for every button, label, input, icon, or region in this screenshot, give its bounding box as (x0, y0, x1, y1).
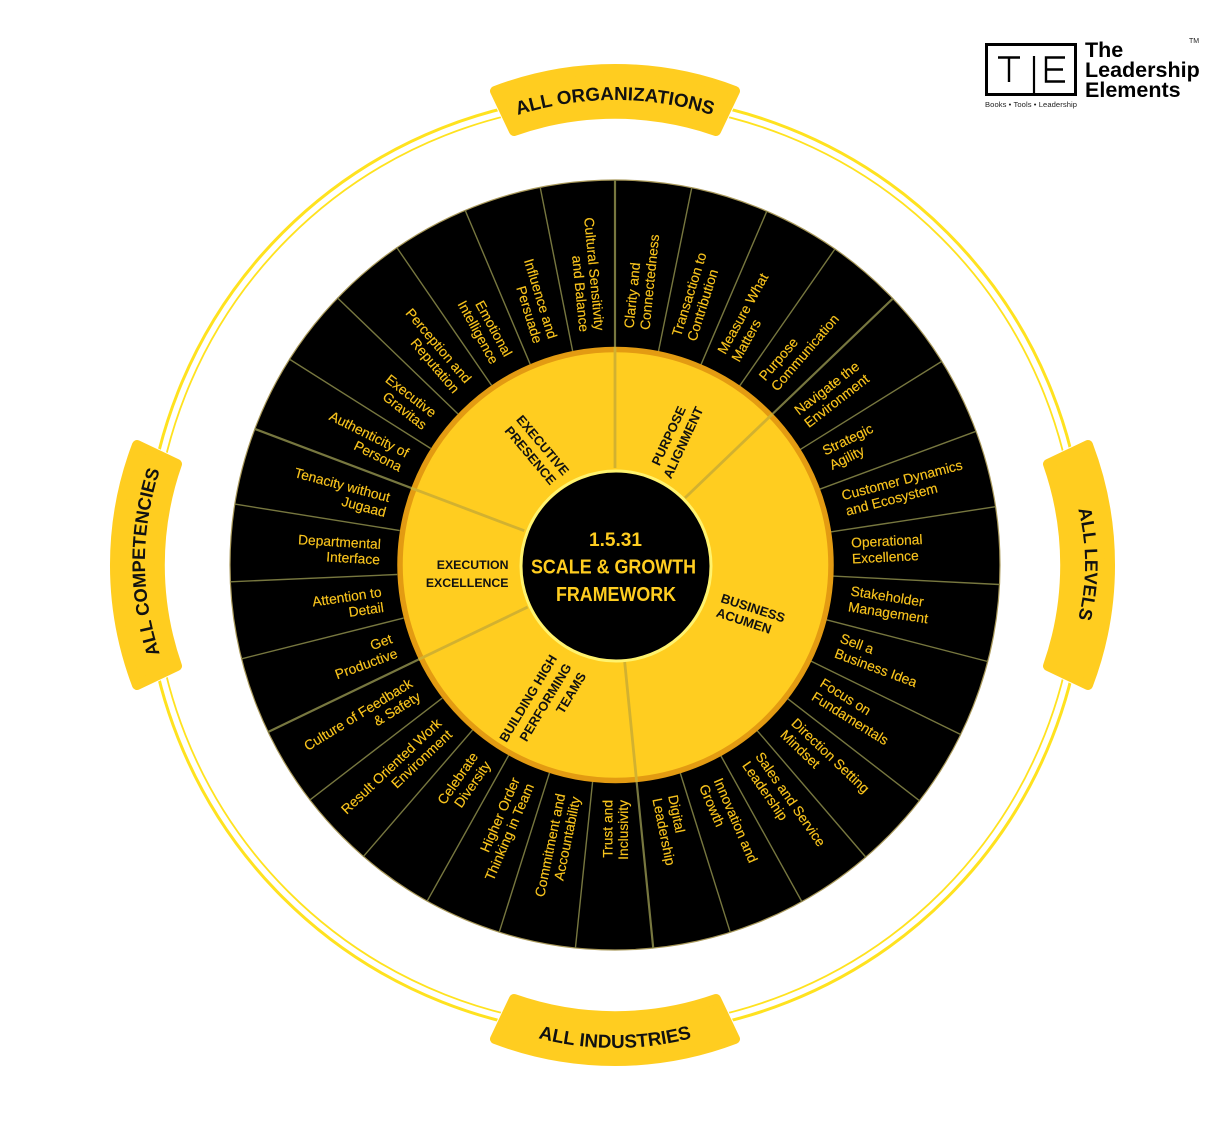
banner: all organizations (490, 64, 740, 136)
banner: all industries (490, 994, 740, 1066)
label: executive gravitas: Gravitas (380, 389, 430, 433)
major spokes between competency groups (255, 180, 893, 948)
label: departmental interface: Departmental (298, 532, 381, 552)
label: clarity and connectedness: Clarity and (622, 262, 643, 329)
center title: FRAMEWORK (556, 584, 676, 606)
logo: The Leadership Elements (985, 38, 1200, 109)
label: tenacity without jugaad: Tenacity without (293, 465, 392, 505)
wheel spokes (230, 187, 1000, 948)
label: commitment and accountability: Commitment and (532, 792, 568, 898)
label: result oriented work environment: Environment (388, 727, 455, 791)
segment labels: 31 competencies (289, 217, 968, 901)
label: influence and persuade: Persuade (513, 284, 545, 345)
label: customer dynamics and ecosystem: and Ecosystem (844, 480, 939, 519)
label: culture of feedback and safety: & Safety (371, 689, 423, 729)
label: emotional intelligence: Emotional (472, 298, 515, 359)
label: innovation and growth: Growth (696, 782, 727, 829)
center hub (521, 471, 711, 661)
category dividers (411, 347, 772, 782)
label: get productive: Get (368, 631, 394, 653)
label: trust and inclusivity: Trust and (600, 800, 616, 858)
category: business acumen: ACUMEN (714, 605, 773, 637)
label: cultural sensitivity and balance: Cultural Sensitivity (581, 217, 607, 331)
category: building high performing teams: BUILDING HIGH (496, 652, 560, 745)
category: building high performing teams: PERFORMING (516, 661, 575, 744)
category: execution excellence: EXCELLENCE (426, 576, 508, 590)
banner: all levels (1043, 440, 1115, 690)
label: celebrate diversity: Diversity (451, 758, 494, 810)
gold category ring (400, 350, 831, 780)
label: attention to detail: Detail (348, 600, 385, 620)
label: trust and inclusivity: Inclusivity (616, 800, 631, 860)
category: business acumen: BUSINESS (719, 591, 787, 625)
logo wordmark: Leadership (1085, 58, 1200, 82)
label: result oriented work environment: Result Oriented Work (338, 716, 445, 817)
label: measure what matters: Matters (729, 317, 764, 364)
label: tenacity without jugaad: Jugaad (340, 494, 388, 520)
label: commitment and accountability: Accountability (552, 795, 583, 882)
logo wordmark: Elements (1085, 78, 1181, 102)
label: direction setting mindset: Mindset (777, 727, 823, 771)
center title: 1.5.31 (589, 529, 642, 551)
category: building high performing teams: TEAMS (553, 669, 589, 716)
label: departmental interface: Interface (326, 549, 381, 567)
label: focus on fundamentals: Fundamentals (809, 689, 891, 748)
label: sales and service leadership: Sales and Service (752, 750, 828, 850)
label: stakeholder management: Management (847, 599, 929, 626)
banner: all competencies: ALL COMPETENCIES (132, 468, 160, 654)
label: strategic agility: Strategic (820, 421, 876, 458)
label: purpose communication: Communication (768, 311, 842, 394)
label: navigate the environment: Environment (802, 371, 872, 431)
logo mark (986, 44, 1076, 95)
label: perception and reputation: Reputation (408, 336, 462, 396)
banner: all industries: ALL INDUSTRIES (538, 1026, 690, 1048)
label: clarity and connectedness: Connectedness (637, 234, 662, 331)
label: cultural sensitivity and balance: and Balance (569, 255, 592, 333)
label: get productive: Productive (333, 646, 400, 682)
label: measure what matters: Measure What (715, 271, 771, 357)
logo tagline: Books • Tools • Leadership (985, 100, 1077, 109)
label: attention to detail: Attention to (311, 585, 383, 609)
label: perception and reputation: Perception and (403, 306, 474, 386)
label: focus on fundamentals: Focus on (817, 676, 874, 718)
label: digital leadership: Digital (665, 794, 688, 834)
label: operational excellence: Excellence (852, 548, 919, 566)
label: higher order thinking in team: Thinking in Team (482, 781, 537, 883)
label: executive gravitas: Executive (383, 372, 439, 421)
label: direction setting mindset: Direction Setting (788, 716, 872, 796)
category: purpose alignment: PURPOSE (648, 404, 689, 468)
category: purpose alignment: ALIGNMENT (660, 404, 706, 481)
label: sell a business idea: Sell a (838, 631, 876, 657)
banner: all competencies (110, 440, 182, 690)
label: authenticity of persona: Persona (352, 438, 405, 475)
label: celebrate diversity: Celebrate (435, 749, 481, 807)
outer double ring (145, 95, 1085, 1035)
label: transaction to contribution: Transaction to (669, 250, 710, 338)
label: purpose communication: Purpose (756, 335, 801, 384)
category: executive presence: PRESENCE (502, 423, 559, 488)
label: culture of feedback and safety: Culture of Feedback (301, 676, 415, 754)
label: customer dynamics and ecosystem: Customer Dynamics (840, 457, 964, 503)
category: executive presence: EXECUTIVE (513, 412, 572, 478)
label: higher order thinking in team: Higher Order (478, 775, 523, 854)
category: execution excellence: EXECUTION (437, 558, 509, 572)
label: strategic agility: Agility (827, 443, 867, 473)
label: operational excellence: Operational (851, 532, 923, 551)
banner: all organizations: ALL ORGANIZATIONS (518, 87, 714, 115)
outer black wheel disc (230, 180, 1000, 950)
label: innovation and growth: Innovation and (711, 776, 760, 865)
label: emotional intelligence: Intelligence (455, 298, 501, 367)
banner: all levels: ALL LEVELS (1078, 510, 1098, 620)
label: authenticity of persona: Authenticity of (327, 408, 411, 461)
center title: SCALE & GROWTH (531, 556, 696, 578)
label: transaction to contribution: Contribution (685, 267, 721, 343)
label: influence and persuade: Influence and (521, 257, 560, 341)
category labels (426, 398, 787, 762)
label: digital leadership: Leadership (649, 797, 678, 867)
label: sell a business idea: Business Idea (833, 646, 919, 690)
label: navigate the environment: Navigate the (792, 358, 862, 418)
label: sales and service leadership: Leadership (739, 759, 791, 824)
label: stakeholder management: Stakeholder (850, 584, 925, 610)
trademark: TM (1189, 38, 1199, 45)
logo wordmark: The (1085, 38, 1123, 62)
